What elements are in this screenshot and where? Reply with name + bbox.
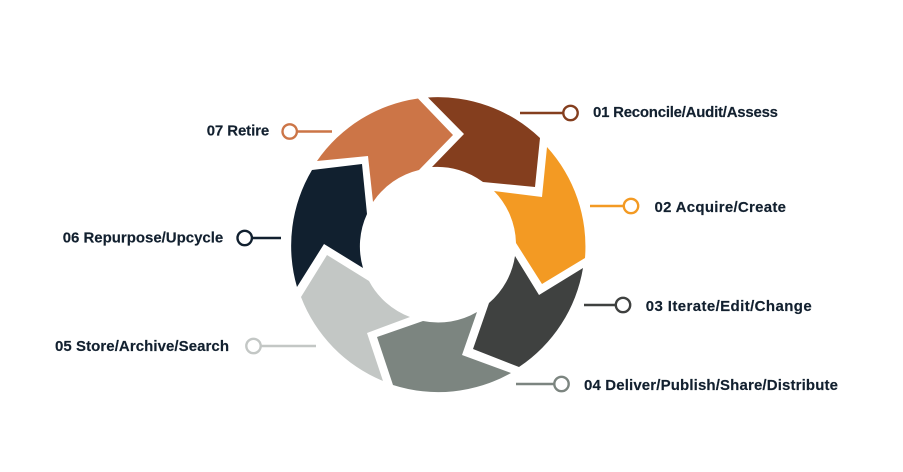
label: 06 Repurpose/Upcycle (63, 230, 281, 246)
connector 02 (590, 199, 638, 213)
connector 01 (520, 106, 578, 120)
label: 01 Reconcile/Audit/Assess (520, 104, 778, 121)
label: 04 Deliver/Publish/Share/Distribute (516, 377, 838, 394)
arrow: 01 Reconcile (428, 97, 540, 187)
connector 06 (238, 231, 281, 245)
label: 02 Acquire/Create (590, 199, 786, 216)
connector 03 (584, 298, 630, 312)
cycle ring of seven arrows (291, 97, 585, 392)
label: 03 Iterate/Edit/Change (584, 298, 812, 315)
connector 05 (246, 339, 316, 353)
text 05: 05 Store/Archive/Search (55, 338, 229, 355)
text 04: 04 Deliver/Publish/Share/Distribute (584, 377, 838, 394)
arrow: 07 Retire (317, 98, 453, 202)
label: 07 Retire (207, 122, 332, 140)
arrow: 04 Deliver (377, 312, 511, 392)
connector 07 (282, 124, 332, 139)
arrow: 03 Iterate (473, 256, 583, 367)
arrow: 05 Store (301, 255, 410, 381)
text 01: 01 Reconcile/Audit/Assess (593, 104, 778, 121)
text 06: 06 Repurpose/Upcycle (63, 230, 223, 246)
text 03: 03 Iterate/Edit/Change (646, 298, 812, 315)
text 07: 07 Retire (207, 122, 269, 140)
label: 05 Store/Archive/Search (55, 338, 316, 355)
text 02: 02 Acquire/Create (654, 199, 786, 216)
arrow: 02 Acquire (494, 147, 585, 284)
connector 04 (516, 377, 569, 391)
arrow: 06 Repurpose (291, 164, 367, 287)
